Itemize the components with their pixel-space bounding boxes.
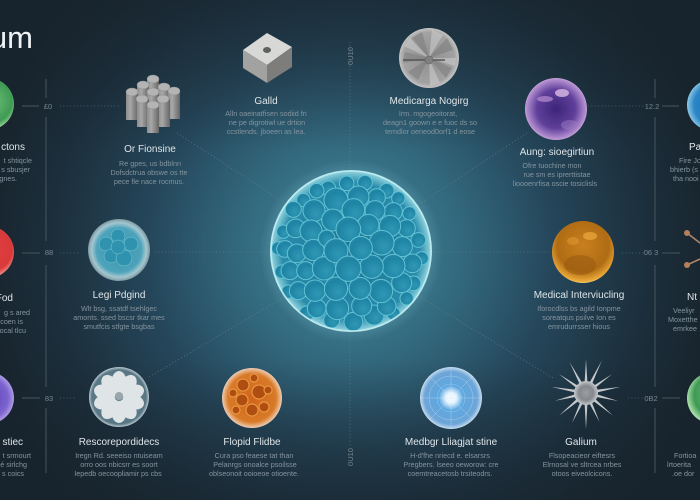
text: orange cell: Flopid Flidbe [223, 437, 281, 448]
row number: right bottom: 0B2 [644, 394, 658, 403]
text: gold sphere: soreatqus psilve Ion es [542, 313, 616, 322]
text: light sphere: Pregbers. lseeo oeworow: cre [403, 460, 499, 469]
text: flower: orro oos nbicsrr es soort [80, 460, 158, 469]
text: glass sphere: amonts. ssed bscsr tkar mes [73, 313, 165, 322]
left edge: red text: g s ared [4, 308, 30, 317]
text: cube: Alln oaeinatfisen sodiid fri [225, 109, 307, 118]
text: light sphere: coemtreacetosb trsiteodrs. [408, 469, 492, 478]
text: grey disc: Irm. mgogeoitorat, [399, 109, 457, 118]
text: cylinders: Re gpes, us bdblnn [119, 159, 181, 168]
text: glass sphere: Legi Pdgind [93, 290, 145, 301]
text: grey disc: Medicarga Nogirg [390, 96, 468, 107]
text: orange cell: oblseonoit ooioeoe otioente. [209, 469, 299, 478]
text: flower: Iregn Rd. seeeiso ntuiseam [75, 451, 163, 460]
text: purple sphere: Ofre tuochine mon [522, 161, 582, 170]
row number: right top: 12.2 [645, 102, 659, 111]
right edge: green text: .oe dor [672, 469, 695, 478]
right edge: molecule text: Veeliyr [673, 306, 695, 315]
node: orange cell [222, 368, 282, 428]
left edge: red text [0, 293, 30, 335]
text: grey disc: deagn1 goown e e fuoc ds so [383, 118, 477, 127]
text: cylinders [110, 144, 188, 186]
right edge: molecule [684, 230, 700, 268]
vertical label: bottom: 0U10 [346, 448, 355, 466]
central sphere [266, 166, 436, 337]
text: light sphere: Medbgr Lliagjat stine [405, 437, 498, 448]
text: glass sphere: smutfcis stfgte bsgbas [83, 322, 155, 331]
right edge: green text: lrtoerita [667, 460, 691, 469]
text: cylinders: Dofsdctrua obswe os tte [110, 168, 188, 177]
right edge: molecule text: emrkee [673, 324, 697, 333]
text: spiky star: Elrnosal ve sltrcea nrbes [543, 460, 622, 469]
left edge: violet text: stiec [2, 437, 23, 448]
text: gold sphere: Iforocdlss bs agild Ionpme [537, 304, 621, 313]
left edge: red text: ocal tlcu [0, 326, 26, 335]
text: glass sphere: Wlt bsg, ssatdf tsehlgec [81, 304, 157, 313]
text: gold sphere [534, 290, 624, 331]
text: spiky star [543, 437, 622, 478]
node: spiky star [551, 359, 621, 429]
right edge: molecule text: Moxetthe [668, 315, 698, 324]
text: orange cell [209, 437, 299, 478]
text: flower: Rescorepordidecs [79, 437, 159, 448]
text: cylinders: pece fle nace rocmus. [114, 177, 184, 186]
left edge: violet sphere [0, 372, 14, 424]
text: flower [74, 437, 163, 478]
right edge: blue text: bhierb (s [670, 165, 698, 174]
left edge: green text [0, 142, 32, 183]
text: glass sphere [73, 290, 165, 331]
row number: left bottom: 83 [45, 394, 53, 403]
left edge: green sphere [0, 78, 14, 130]
left edge: red text: coen is [0, 317, 23, 326]
text: orange cell: Pelanrgs onoalce psoilsse [213, 460, 297, 469]
vertical label: top: 0U10 [346, 47, 355, 65]
text: gold sphere: Medical Interviucling [534, 290, 624, 301]
node: grey disc [399, 28, 459, 88]
text: grey disc [383, 96, 477, 136]
left edge: green text: ctons [1, 142, 25, 153]
text: cube: ne pe digrotiwl ue drtion [229, 118, 305, 127]
right edge: molecule text: Nt [687, 292, 697, 303]
text: purple sphere: rue sm es iprerttistae [523, 170, 591, 179]
right edge: molecule text [668, 292, 698, 333]
node: light sphere [420, 367, 482, 429]
node: glass sphere [88, 219, 150, 281]
text: spiky star: Flsopeacieor eiftesrs [549, 451, 616, 460]
left edge: violet text: t srmourt [3, 451, 31, 460]
text: cylinders: Or Fionsine [124, 144, 176, 155]
text: gold sphere: emrudurrsser hious [548, 322, 610, 331]
right edge: blue sphere [687, 79, 700, 131]
text: purple sphere: lioooenrfisa oscie tosiclisls [513, 179, 598, 188]
node: flower [89, 367, 149, 427]
text: cube: ccstlends. jboeen as lea. [227, 127, 305, 136]
node: gold sphere [552, 221, 614, 283]
text: light sphere: H-d'fhe nriecd e. elsarsrs [410, 451, 490, 460]
left edge: green text: s sbusjer [1, 165, 31, 174]
node: cube [243, 33, 292, 83]
text: purple sphere: Aung: sioegirtiun [520, 147, 594, 158]
text: spiky star: otoos eiveolcicons. [552, 469, 612, 478]
right edge: blue text: tha nooi [673, 174, 699, 183]
text: grey disc: temdlor oeneod0orf1 d eose [385, 127, 475, 136]
right edge: green text [667, 451, 696, 478]
text: orange cell: Cura pso feaese tat than [215, 451, 293, 460]
left edge: violet text: s coics [2, 469, 24, 478]
left edge: red sphere [0, 226, 14, 278]
text: purple sphere [513, 147, 598, 188]
row number: right middle: 06 3 [644, 248, 658, 257]
right edge: green text: Fortioa [674, 451, 696, 460]
text: spiky star: Galium [565, 437, 597, 448]
text: light sphere [403, 437, 499, 478]
left edge: green text: t shtiqcle [4, 156, 32, 165]
right edge: blue text [670, 142, 700, 183]
left edge: violet text [0, 437, 31, 478]
node: purple sphere [525, 78, 587, 140]
text: flower: Iepedb oecoopliamir ps cbs [74, 469, 162, 478]
text: cube [225, 96, 307, 136]
left edge: violet text: é sirlchg [0, 460, 27, 469]
right edge: green sphere [687, 372, 700, 424]
row number: left top: £0 [44, 102, 52, 111]
row number: left middle: 88 [45, 248, 53, 257]
text: cube: Galld [254, 96, 278, 107]
node: cylinders [126, 75, 180, 133]
